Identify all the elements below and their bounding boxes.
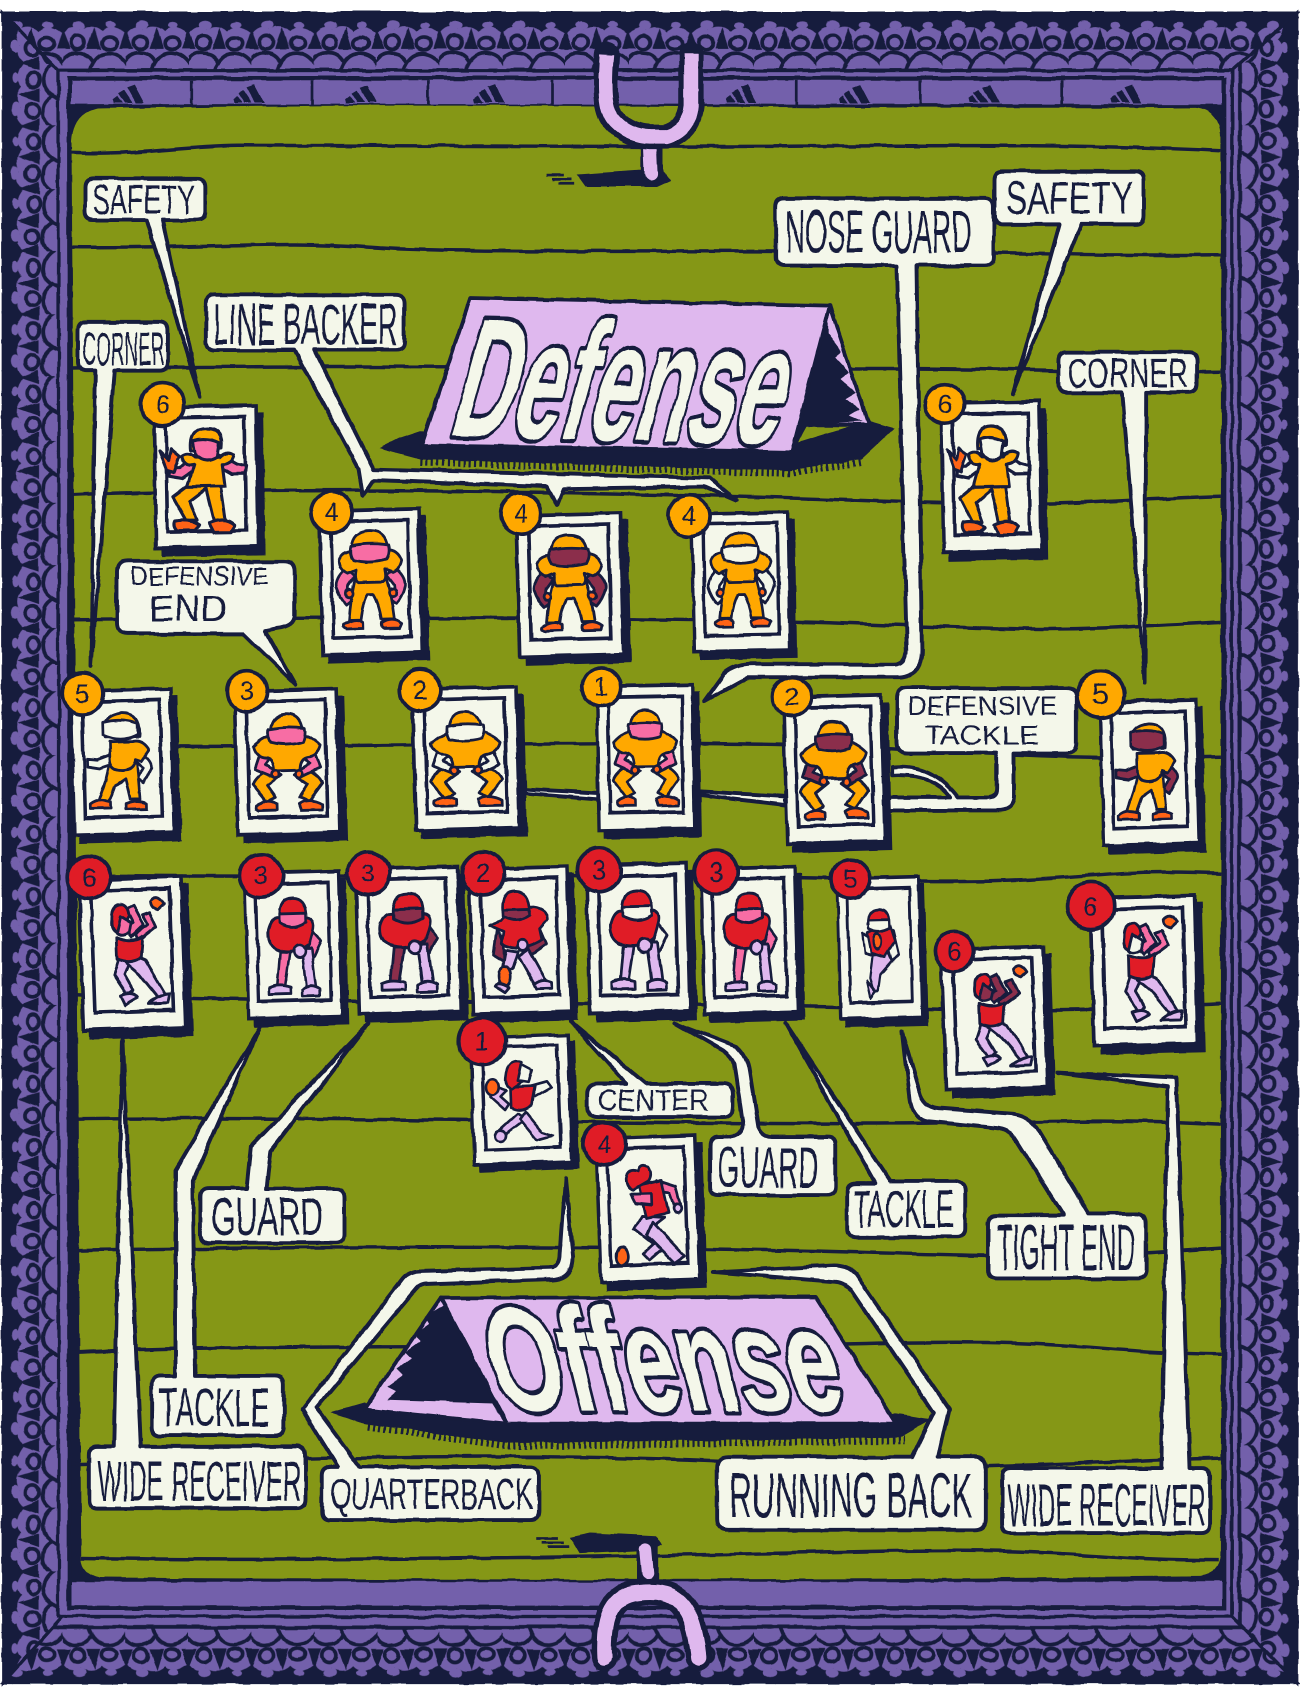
- card: tackle left: 3: [254, 860, 268, 890]
- card: wide receiver inside: 6: [947, 936, 962, 966]
- label: tackle left: TACKLE: [159, 1378, 270, 1438]
- label: tackle right: TACKLE: [854, 1180, 953, 1240]
- tent sign: Defense: [379, 285, 895, 480]
- card: nose guard: 1: [594, 672, 608, 702]
- card: wide receiver left: 6: [82, 862, 96, 892]
- card: right corner: [1077, 671, 1206, 854]
- goal post: bottom: [536, 1533, 699, 1658]
- card: defensive tackle left: [400, 670, 527, 839]
- label: corner right: [1058, 350, 1197, 683]
- card: linebacker 3: [668, 495, 797, 660]
- label: corner left: [78, 322, 168, 666]
- label: defensive tackle: DEFENSIVE: [908, 690, 1057, 721]
- label: tight end: [902, 1031, 1146, 1284]
- label: quarterback: [302, 1178, 573, 1520]
- card: right safety, defense: 6: [937, 389, 952, 419]
- card: defensive tackle right: 2: [785, 681, 799, 711]
- card: guard right: 3: [592, 855, 606, 885]
- label: defensive tackle: [886, 688, 1077, 810]
- card: linebacker 3: 4: [682, 500, 696, 530]
- card: tight end: [831, 859, 928, 1028]
- text: CORNER: [82, 323, 165, 376]
- card: center: 2: [476, 858, 490, 888]
- label: linebacker: LINE BACKER: [213, 293, 398, 358]
- card: nose guard: [582, 667, 702, 839]
- card: quarterback: [458, 1017, 580, 1173]
- label: nose guard: [704, 198, 993, 701]
- label: running back: RUNNING BACK: [729, 1461, 973, 1531]
- card: left safety, defense: 6: [155, 389, 170, 419]
- label: running back: [713, 1265, 986, 1531]
- card: center: [462, 852, 578, 1023]
- card: right corner: 5: [1092, 678, 1109, 711]
- label: defensive tackle: TACKLE: [924, 719, 1039, 750]
- title: Defense: Defense: [436, 285, 817, 480]
- card: defensive end: [226, 671, 348, 844]
- label: defensive end: DEFENSIVE: [130, 561, 269, 591]
- card: linebacker 2: [500, 493, 631, 666]
- card: guard left: 3: [361, 858, 376, 888]
- label: tackle right: [785, 1023, 965, 1240]
- goal post: top: [547, 54, 691, 186]
- tent sign: Offense: [330, 1278, 932, 1445]
- label: safety left: SAFETY: [92, 177, 195, 223]
- label: corner right: CORNER: [1067, 350, 1188, 396]
- advertising boards with logos: [113, 80, 1142, 106]
- label: defensive end: [117, 561, 296, 685]
- card: left corner: [62, 673, 182, 844]
- card: wide receiver right: 6: [1084, 892, 1098, 922]
- card: wide receiver left: [67, 856, 193, 1040]
- label: linebacker: [206, 293, 737, 505]
- label: guard right: GUARD: [717, 1135, 819, 1200]
- label: guard left: GUARD: [211, 1187, 323, 1247]
- label: guard right: [675, 1023, 835, 1200]
- card: wide receiver right: [1067, 882, 1206, 1055]
- label: tackle left: [152, 1027, 284, 1438]
- card: guard right: [577, 848, 697, 1023]
- card: running back: [583, 1122, 707, 1291]
- card: defensive end: 3: [240, 676, 254, 706]
- label: nose guard: NOSE GUARD: [785, 198, 972, 266]
- card: defensive tackle left: 2: [413, 675, 428, 705]
- card: linebacker 1: 4: [324, 497, 339, 527]
- football field: [67, 104, 1224, 1582]
- card: right safety, defense: [925, 385, 1049, 561]
- text: WIDE RECEIVER: [97, 1450, 301, 1513]
- card: quarterback: 1: [475, 1026, 489, 1056]
- label: safety left: [84, 177, 206, 398]
- yard lines: [72, 145, 1221, 1560]
- card: running back: 4: [597, 1129, 612, 1159]
- label: defensive end: END: [149, 588, 227, 629]
- card: tackle right: 3: [709, 857, 723, 887]
- label: safety right: [994, 171, 1144, 393]
- connector: defensive tackles line: [520, 789, 785, 805]
- label: quarterback: QUARTERBACK: [330, 1471, 533, 1519]
- card: wide receiver inside: [935, 932, 1056, 1099]
- card: tackle right: [694, 851, 805, 1023]
- card: linebacker 1: [311, 492, 430, 664]
- card: guard left: [347, 852, 469, 1023]
- label: guard left: [200, 1024, 368, 1247]
- label: center: CENTER: [598, 1085, 708, 1118]
- card: tight end: 5: [843, 863, 858, 893]
- title: Offense: Offense: [467, 1278, 857, 1442]
- label: wide receiver right: [1002, 1073, 1210, 1538]
- label: wide receiver left: [89, 1040, 305, 1513]
- card: linebacker 2: 4: [514, 498, 528, 528]
- card: defensive tackle right: [772, 677, 892, 853]
- card: left corner: 5: [75, 678, 90, 708]
- label: center: [570, 1021, 733, 1118]
- label: safety right: SAFETY: [1005, 173, 1133, 224]
- card: left safety, defense: [141, 383, 266, 557]
- card: tackle left: [239, 854, 349, 1027]
